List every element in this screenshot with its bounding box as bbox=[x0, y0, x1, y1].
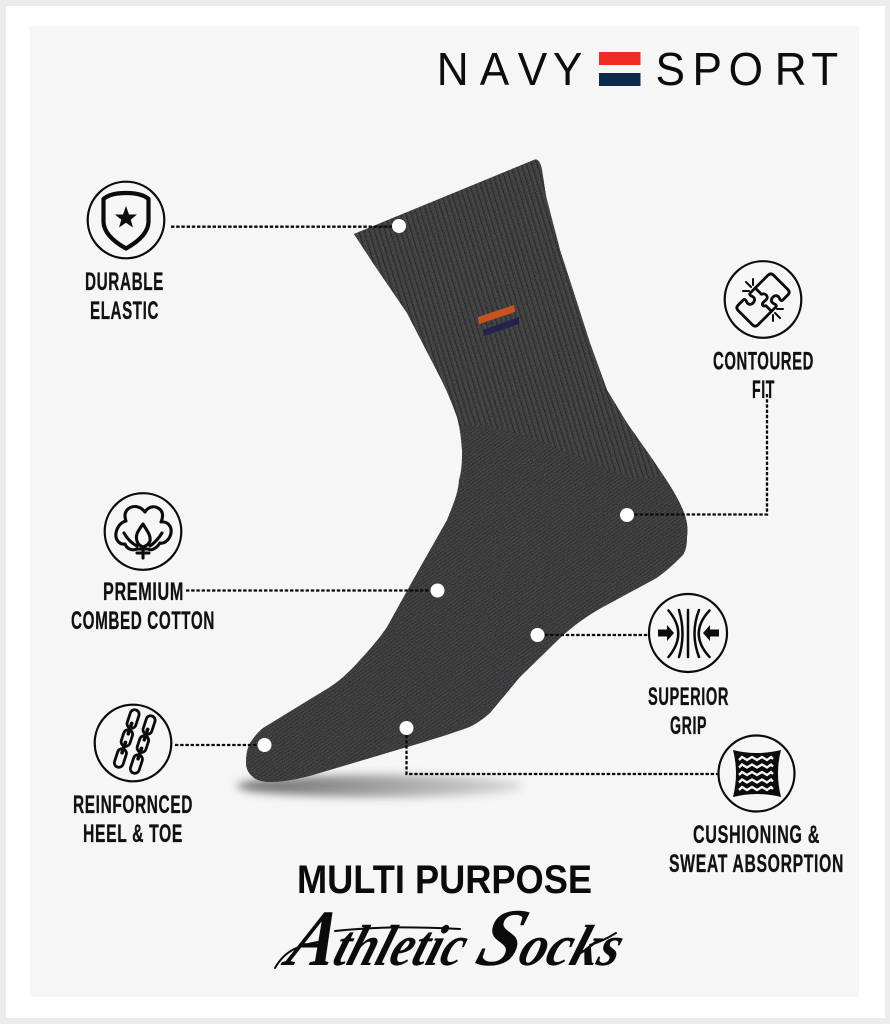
title bbox=[274, 858, 639, 984]
brand word: sport: SPORT bbox=[656, 43, 838, 95]
script title bbox=[274, 893, 639, 984]
sock shadow bbox=[237, 775, 523, 797]
feature: cushioning and sweat absorption bbox=[669, 736, 844, 878]
feature: reinforced heel and toe bbox=[73, 705, 193, 848]
script swashes bbox=[275, 927, 616, 968]
script word: socks: Socks bbox=[467, 893, 639, 984]
label line two: FIT bbox=[752, 376, 775, 404]
icon: cotton boll bbox=[105, 493, 181, 570]
icon: puzzle pieces bbox=[725, 261, 801, 338]
label line two: ELASTIC bbox=[90, 297, 159, 325]
icon: shield with star bbox=[88, 182, 164, 258]
icon: chains bbox=[95, 705, 171, 781]
feature: premium combed cotton bbox=[71, 493, 215, 635]
flag mark bbox=[599, 52, 640, 86]
sock body bbox=[246, 159, 688, 782]
label: CUSHIONING & bbox=[693, 821, 820, 849]
brand word: navy: NAVY bbox=[437, 43, 582, 95]
sock fabric bbox=[246, 159, 688, 782]
feature: durable elastic bbox=[85, 182, 164, 325]
script word: athletic: Athletic bbox=[274, 894, 483, 983]
label: PREMIUM bbox=[103, 578, 184, 606]
label: SUPERIOR bbox=[648, 683, 729, 711]
label: CONTOURED bbox=[713, 348, 814, 376]
callout dots bbox=[258, 219, 634, 752]
label: DURABLE bbox=[85, 268, 164, 296]
feature: superior grip bbox=[648, 594, 729, 740]
sock bbox=[246, 159, 688, 782]
icon: compression arrows bbox=[649, 594, 727, 672]
leg ribbing bbox=[354, 160, 662, 480]
brand logo bbox=[437, 43, 838, 95]
label: REINFORNCED bbox=[73, 791, 193, 819]
sock embroidered logo bbox=[478, 305, 519, 336]
label line two: GRIP bbox=[670, 712, 707, 740]
icon: cushion bbox=[718, 736, 794, 812]
callout lines bbox=[171, 227, 767, 774]
label line two: COMBED COTTON bbox=[71, 607, 215, 635]
title line one: MULTI PURPOSE bbox=[297, 858, 592, 902]
label line two: HEEL & TOE bbox=[83, 820, 183, 848]
feature: contoured fit bbox=[713, 261, 814, 404]
